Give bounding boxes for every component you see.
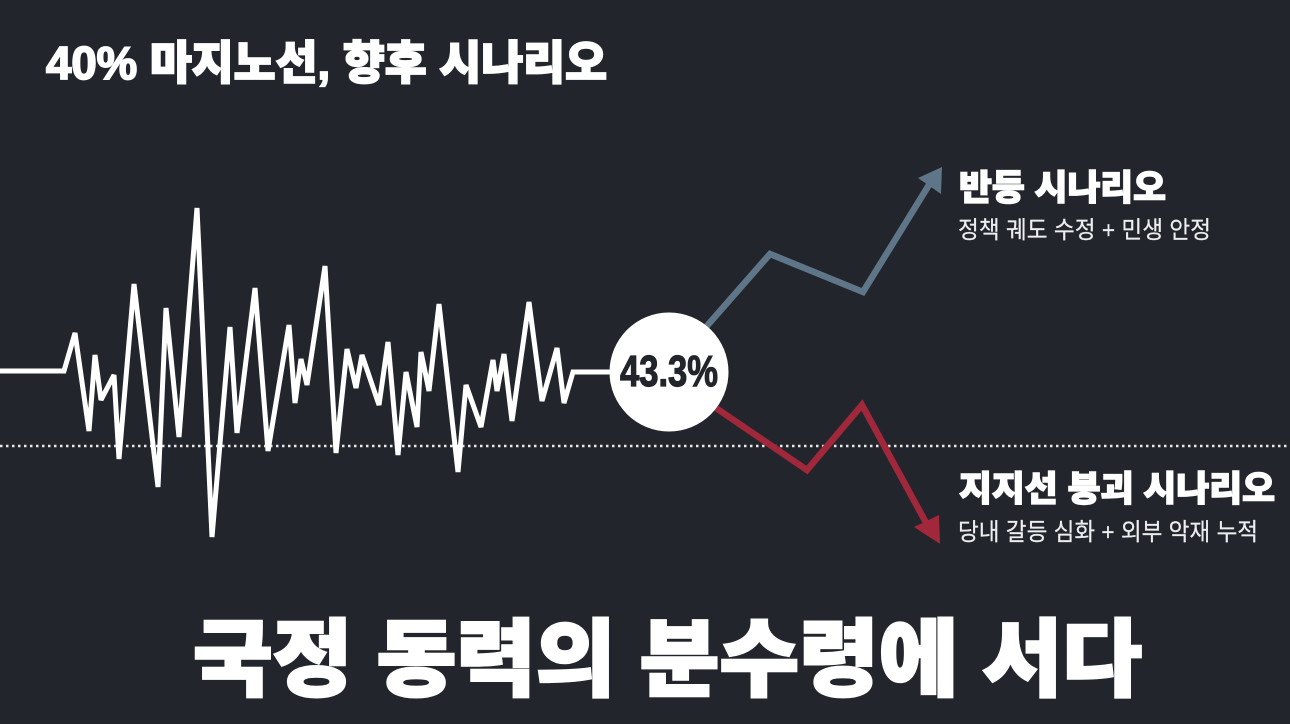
label: rebound scenario: 정책 궤도 수정 + 민생 안정 [958, 217, 1211, 244]
label: support collapse scenario [958, 470, 1275, 546]
headline: 국정 동력의 분수령에 서다 [193, 613, 1142, 707]
label: rebound scenario [958, 169, 1211, 244]
arrow: rebound scenario [706, 167, 942, 327]
line chart: volatile approval rating [0, 208, 620, 537]
data point: 43.3% circle: 43.3% [620, 347, 718, 396]
arrow: support collapse scenario [716, 405, 940, 544]
label: rebound scenario: 반등 시나리오 [959, 169, 1166, 208]
label: support collapse scenario: 지지선 붕괴 시나리오 [959, 470, 1275, 509]
label: support collapse scenario: 당내 갈등 심화 + 외부 악재 누적 [958, 519, 1258, 546]
title: 40% 마지노선, 향후 시나리오 [46, 37, 607, 89]
data point: 43.3% circle [610, 312, 728, 432]
